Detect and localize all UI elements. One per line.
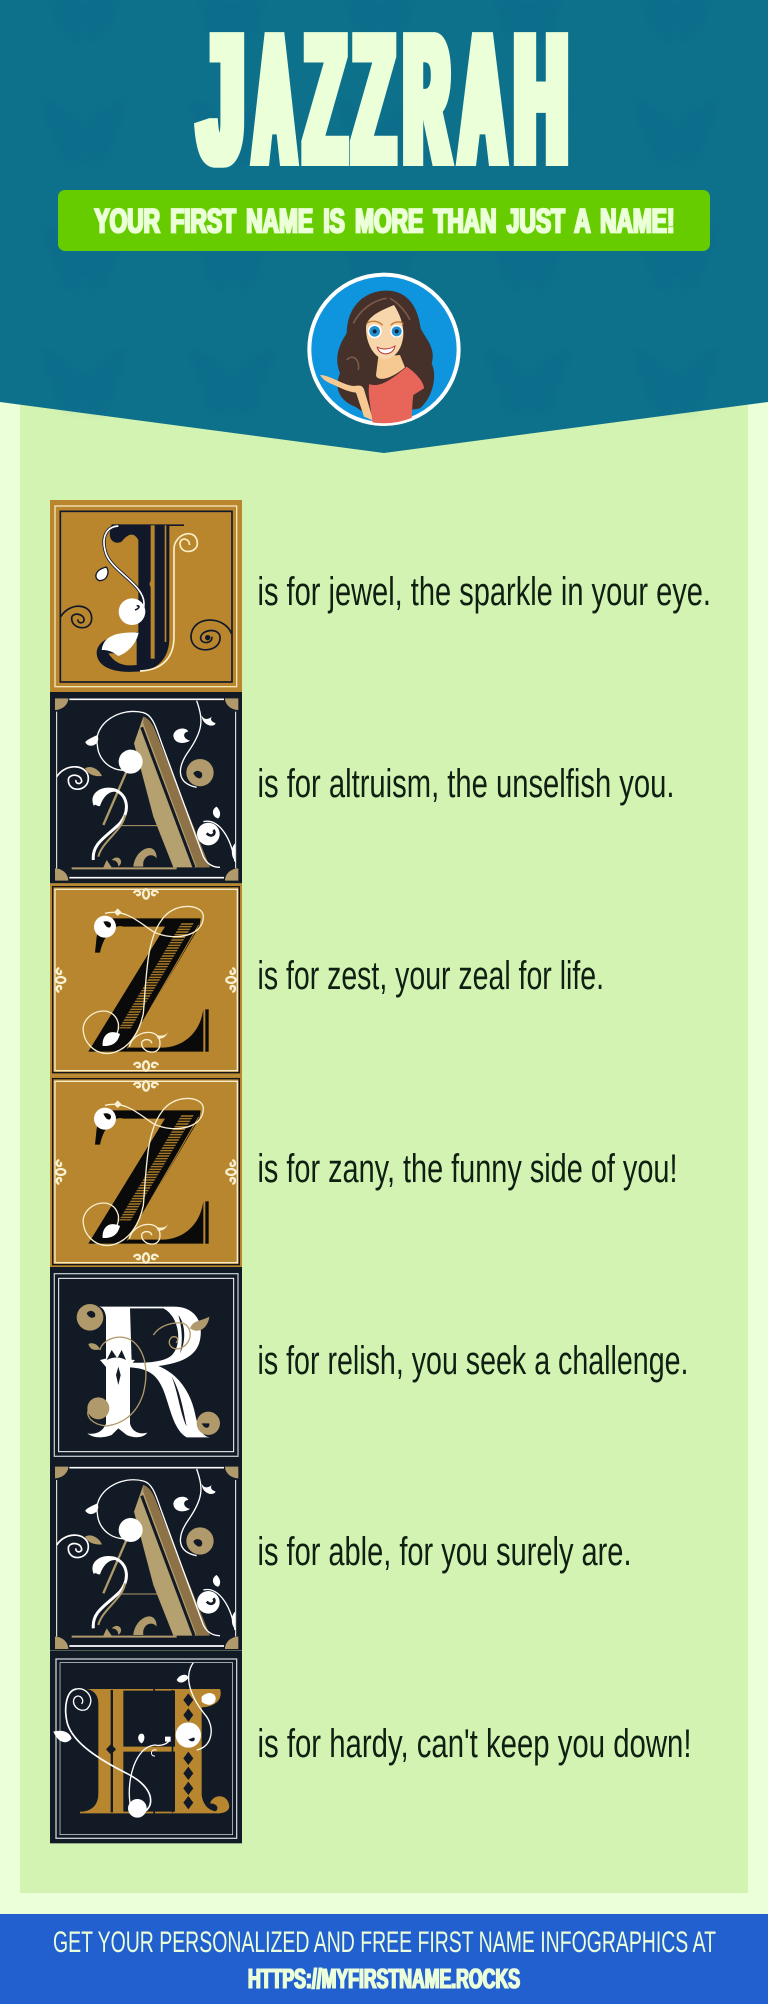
- letter tile: A (second): [50, 1459, 242, 1650]
- title: Z: [305, 0, 345, 200]
- icon: cartoon woman avatar: [309, 275, 459, 424]
- title: R: [405, 0, 449, 200]
- header: teal banner: [0, 0, 768, 453]
- letter tile: Z (second): [50, 1075, 242, 1267]
- text rows: [258, 570, 711, 1766]
- panel: content background: [20, 395, 748, 1893]
- letter tile: J: [50, 500, 242, 692]
- title: J: [199, 0, 243, 200]
- subtitle bar: [58, 190, 710, 251]
- header: teal banner: H: [515, 0, 567, 200]
- title: Z: [354, 0, 394, 200]
- footer line 2: url: HTTPS://MYFIRSTNAME.ROCKS: [248, 1963, 520, 1994]
- title: A: [460, 0, 504, 200]
- letter tile: H: [50, 1651, 242, 1843]
- text: A line 2: is for able, for you surely are.: [258, 1530, 632, 1574]
- letter tile: R: [50, 1267, 242, 1459]
- title: A: [254, 0, 294, 200]
- text: Z line: is for zest, your zeal for life.: [258, 954, 604, 998]
- footer: [0, 1914, 768, 2004]
- letter tile: Z: [50, 883, 242, 1075]
- letter tile: A: [50, 692, 242, 883]
